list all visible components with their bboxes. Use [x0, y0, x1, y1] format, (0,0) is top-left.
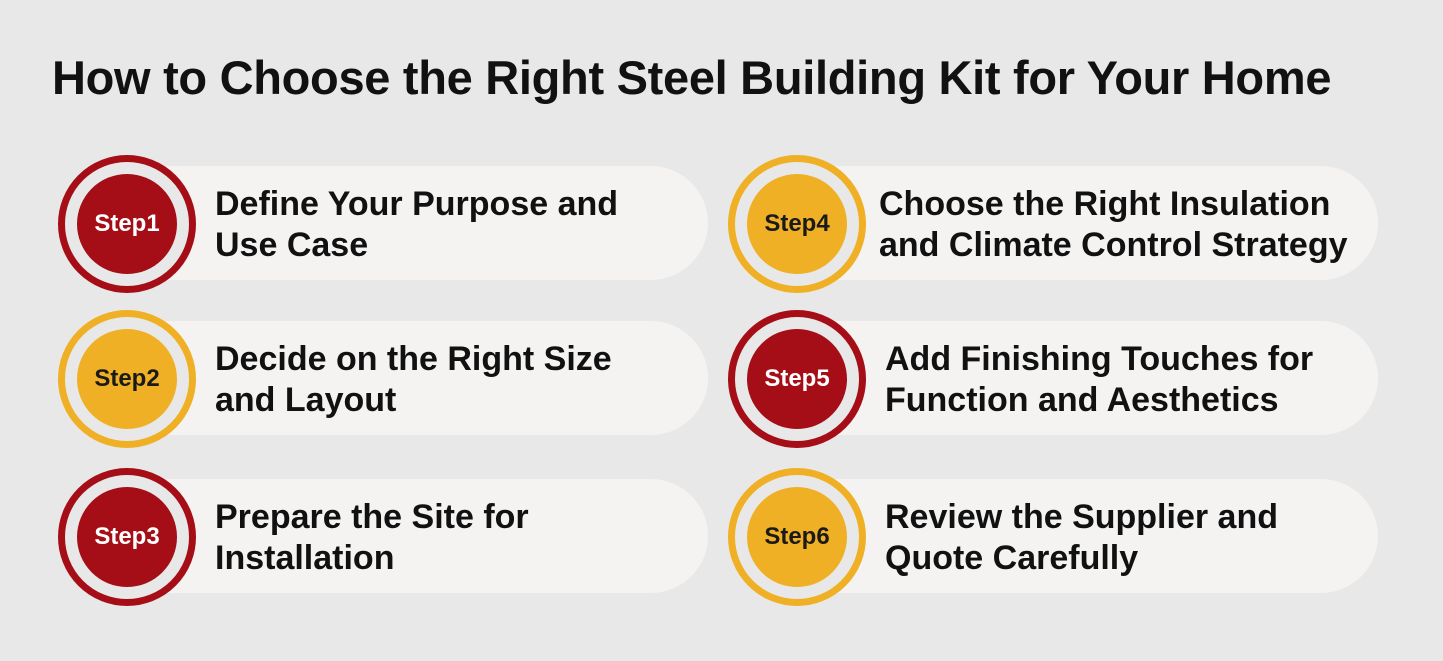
step 5 [728, 310, 1378, 448]
step 4: and Climate Control Strategy [879, 226, 1348, 264]
step 6: Quote Carefully [885, 539, 1138, 577]
step 3: Installation [215, 539, 394, 577]
step 2: Decide on the Right Size [215, 340, 612, 378]
step 6 [728, 468, 1378, 606]
step 2 [58, 310, 708, 448]
step 6: Review the Supplier and [885, 498, 1278, 536]
step 1: Step1 [94, 210, 160, 237]
step 5: Step5 [764, 365, 830, 392]
step 2: and Layout [215, 381, 396, 419]
step 4 [728, 155, 1378, 293]
step 3 [58, 468, 708, 606]
step 5: Function and Aesthetics [885, 381, 1279, 419]
step 5: Add Finishing Touches for [885, 340, 1313, 378]
step 1 [58, 155, 708, 293]
step 1: Define Your Purpose and [215, 185, 618, 223]
step 4: Step4 [764, 210, 830, 237]
step 1: Use Case [215, 226, 368, 264]
step 4: Choose the Right Insulation [879, 185, 1330, 223]
step 3: Step3 [94, 523, 160, 550]
step 2: Step2 [94, 365, 160, 392]
step 6: Step6 [764, 523, 830, 550]
step 3: Prepare the Site for [215, 498, 529, 536]
title: How to Choose the Right Steel Building Kit for Your Home [52, 51, 1331, 104]
